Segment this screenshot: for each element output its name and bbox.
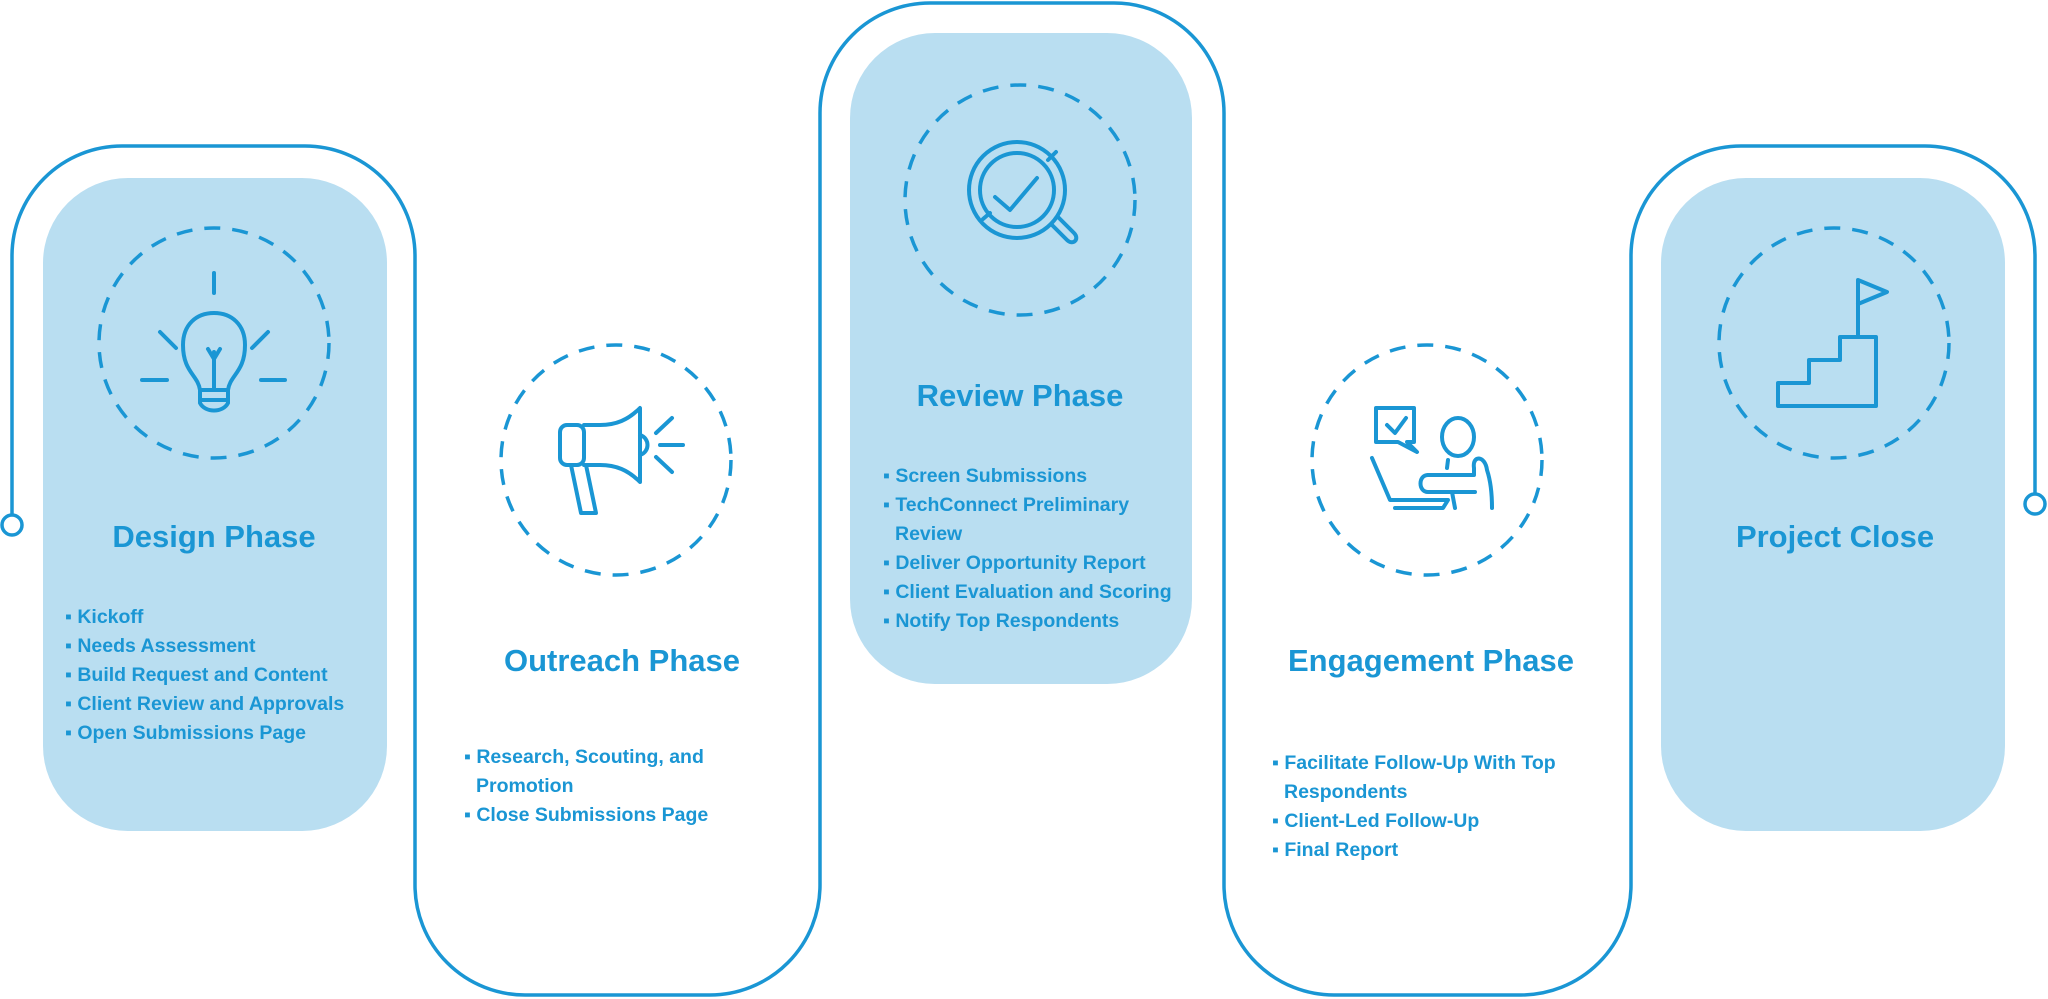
list: outreach tasks [464,746,708,826]
list: design tasks: ▪ Needs Assessment [65,635,256,657]
list: review tasks [883,465,1172,632]
list: engagement tasks [1272,752,1556,861]
list: review tasks: ▪ Screen Submissions [883,465,1087,487]
icon: lightbulb [142,273,285,410]
panel: outreach phase [464,643,740,826]
list: design tasks: ▪ Kickoff [65,606,144,628]
list: outreach tasks: ▪ Close Submissions Page [464,804,708,826]
icon: megaphone [560,408,683,513]
heading: Project Close: Project Close [1736,519,1934,554]
heading: Engagement Phase: Engagement Phase [1288,643,1574,678]
list: review tasks: ▪ Deliver Opportunity Report [883,552,1146,574]
panel: design phase [65,519,344,744]
icon: stairs with flag [1778,280,1887,406]
list: review tasks: Review [895,523,963,545]
icon: person at laptop [1372,408,1492,508]
icon: magnifier check [969,142,1076,242]
list: review tasks: ▪ TechConnect Preliminary [883,494,1129,516]
list: outreach tasks: Promotion [476,775,574,797]
list: engagement tasks: ▪ Client-Led Follow-Up [1272,810,1479,832]
list: review tasks: ▪ Client Evaluation and Scoring [883,581,1172,603]
heading: Review Phase: Review Phase [917,378,1123,413]
list: design tasks [65,606,344,744]
heading: Outreach Phase: Outreach Phase [504,643,740,678]
list: engagement tasks: ▪ Final Report [1272,839,1399,861]
list: design tasks: ▪ Open Submissions Page [65,722,306,744]
dashed circles [99,85,1949,575]
list: engagement tasks: ▪ Facilitate Follow-Up With Top [1272,752,1556,774]
panel: engagement phase [1272,643,1574,861]
list: design tasks: ▪ Client Review and Approvals [65,693,344,715]
list: engagement tasks: Respondents [1284,781,1408,803]
panel backgrounds [43,33,2005,831]
list: outreach tasks: ▪ Research, Scouting, and [464,746,704,768]
list: design tasks: ▪ Build Request and Content [65,664,328,686]
list: review tasks: ▪ Notify Top Respondents [883,610,1119,632]
heading: Design Phase: Design Phase [112,519,316,554]
panel: review phase [883,378,1172,632]
